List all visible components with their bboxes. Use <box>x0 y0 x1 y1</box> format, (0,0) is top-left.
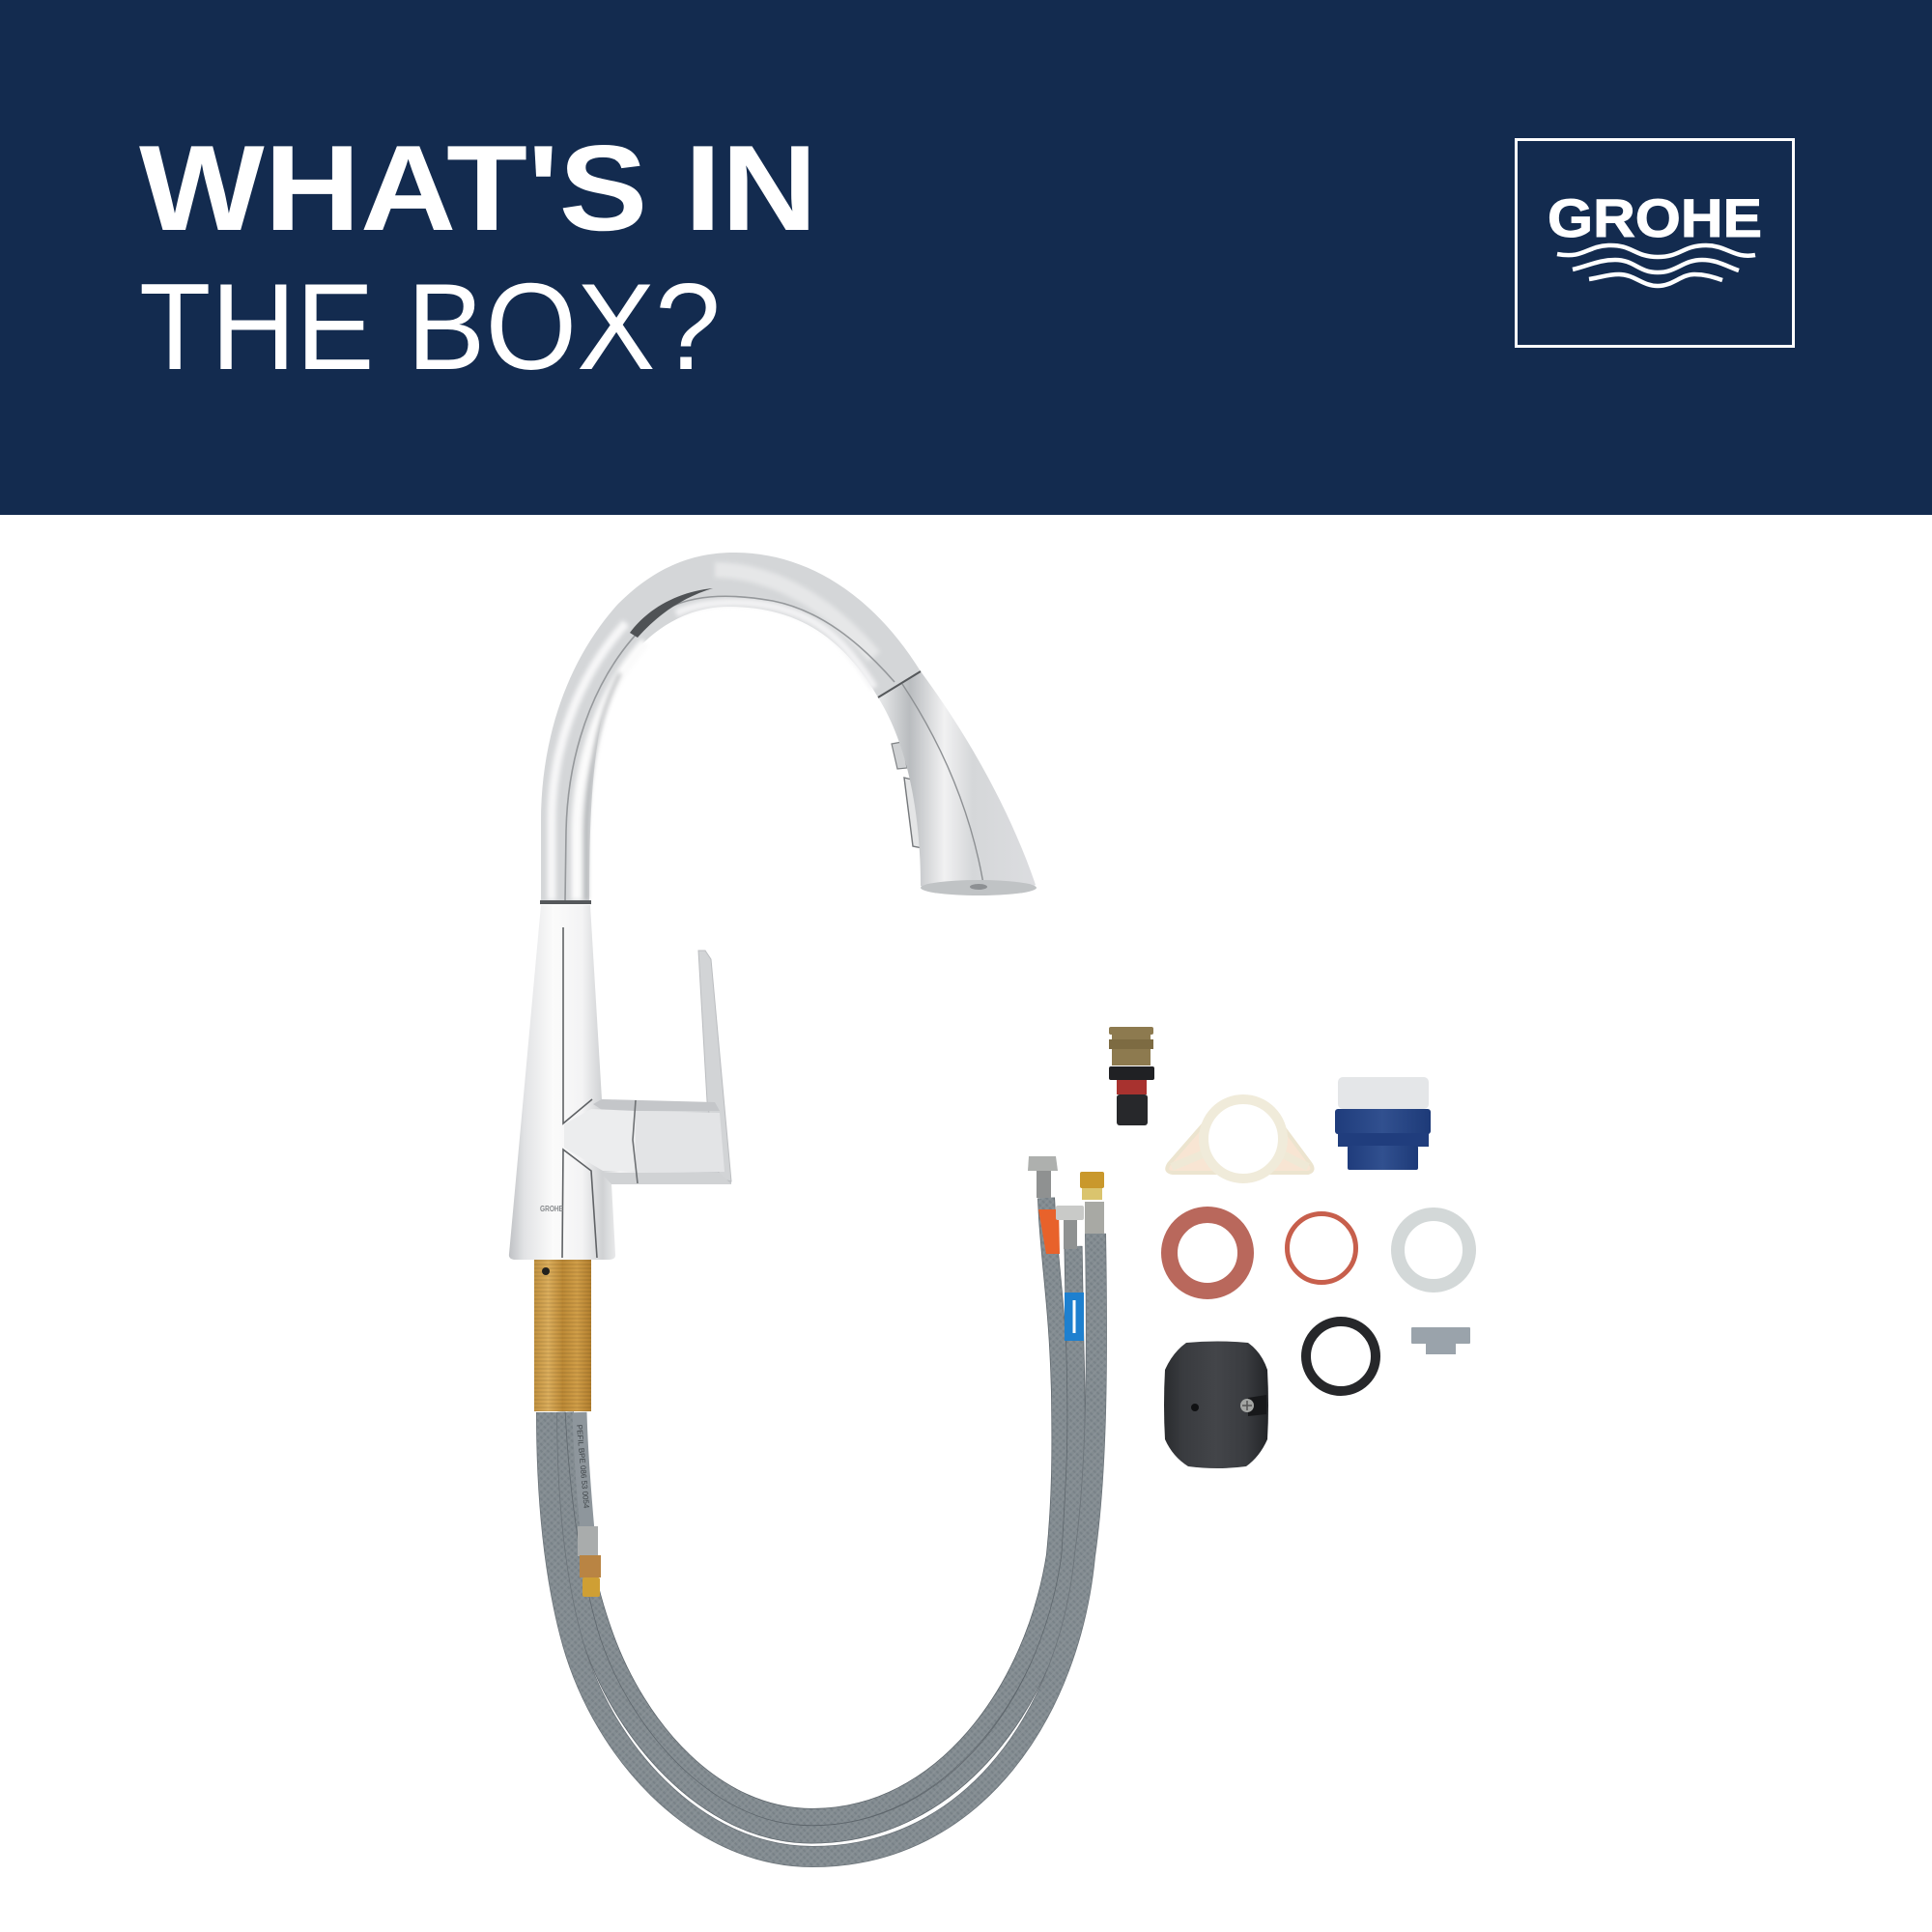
hot hose fittings <box>1028 1156 1060 1254</box>
title <box>139 120 817 395</box>
part: black counterweight <box>1164 1341 1268 1468</box>
part: red o-ring <box>1287 1213 1356 1283</box>
body mark: GROHE <box>540 1205 564 1213</box>
title: WHAT'S IN <box>139 120 817 256</box>
header band <box>0 0 1932 515</box>
part: grey washer <box>1398 1214 1469 1286</box>
braided supply hoses <box>547 1198 1096 1857</box>
spray head <box>878 671 1037 895</box>
handle front <box>636 1111 724 1173</box>
faucet body and handle <box>509 905 731 1260</box>
part: mounting bracket <box>1167 1099 1313 1179</box>
part: blue and white cap <box>1335 1077 1431 1170</box>
hose: middle <box>556 1246 1076 1834</box>
faucet spout <box>540 553 921 904</box>
GROHE logo: GROHE <box>1548 187 1762 248</box>
hose: inner <box>565 1198 1060 1817</box>
GROHE logo <box>1517 139 1793 346</box>
brass hose fittings <box>1080 1172 1104 1234</box>
pull-out tube with fitting: PEFIL BPE 086 53 0054 <box>575 1424 591 1509</box>
part: black washer <box>1306 1321 1376 1391</box>
part: red gasket <box>1169 1215 1246 1291</box>
part: grey clip <box>1411 1327 1470 1354</box>
pull-out tube with fitting <box>575 1412 601 1597</box>
cold hose fittings <box>1056 1206 1084 1341</box>
spout highlights <box>552 570 874 900</box>
title: THE BOX? <box>139 258 721 395</box>
hose: outer <box>547 1234 1096 1857</box>
lever <box>698 951 731 1181</box>
part: cartridge <box>1109 1027 1154 1125</box>
spout seam and reflection <box>565 596 895 901</box>
threaded brass shank <box>534 1259 591 1411</box>
body seams <box>562 927 597 1258</box>
handle top <box>593 1099 720 1111</box>
